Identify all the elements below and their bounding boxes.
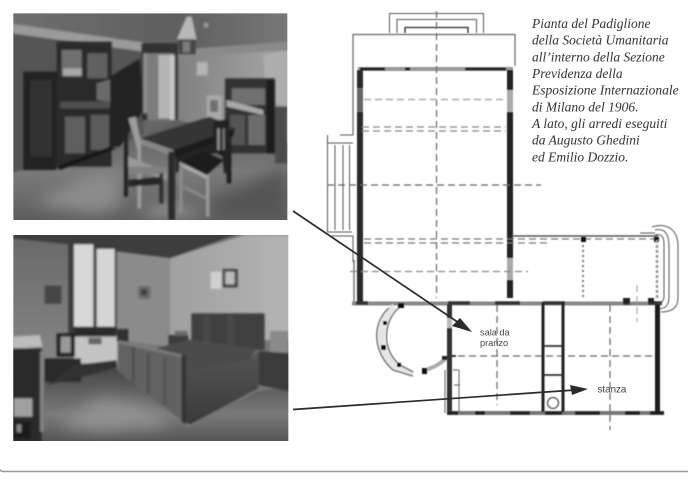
caption text: della Società Umanitaria [532,33,669,48]
caption text: Esposizione Internazionale [531,83,679,98]
west stairs [328,135,353,262]
label: sala da pranzo: sala da [480,328,510,338]
label: stanza: stanza [598,384,627,396]
label: sala da pranzo: pranzo [480,338,508,348]
caption text: all’interno della Sezione [532,49,665,64]
photo: bedroom furniture [10,232,292,445]
photo: dining room furniture [10,10,290,223]
north entrance porch [390,14,484,33]
dashed grid lines [327,11,660,430]
east wing [512,236,659,303]
bottom rule [0,470,688,472]
caption text: ed Emilio Dozzio. [532,149,628,164]
caption text: A lato, gli arredi eseguiti [531,116,668,131]
arrow: dining room photo to plan [293,211,472,332]
semicircular bay [377,303,447,376]
lower wing walls [445,302,664,413]
caption text: Previdenza della [531,66,623,81]
arrow: bedroom photo to plan [293,385,588,410]
floor plan of the pavilion [327,11,678,430]
main hall outer and inner walls [352,34,662,305]
caption text: da Augusto Ghedini [532,133,640,148]
caption text: di Milano del 1906. [532,99,638,114]
north-east curved stair [640,226,678,312]
caption text: Pianta del Padiglione [531,16,650,31]
